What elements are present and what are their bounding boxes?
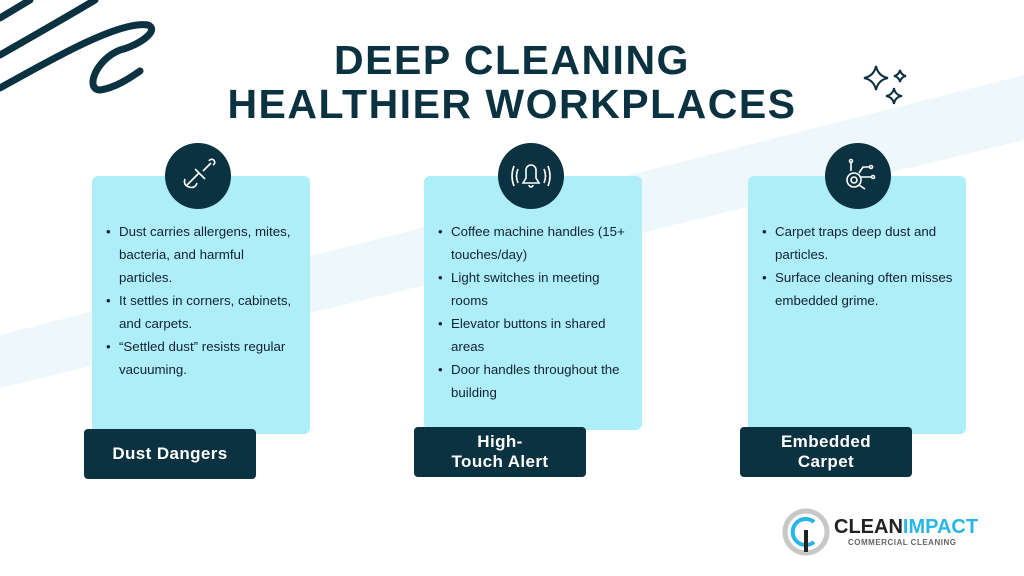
panel: dust dangers <box>92 176 310 434</box>
label: dust dangers: Dust Dangers <box>112 444 228 463</box>
logo <box>782 508 978 556</box>
label: high touch <box>414 427 586 477</box>
logo: COMMERCIAL CLEANING <box>848 538 956 547</box>
label: dust dangers <box>84 429 256 479</box>
icon: duster <box>165 143 231 209</box>
panel: dust dangers: It settles in corners, cabinets, and carpets. <box>119 293 291 331</box>
panel: dust dangers: “Settled dust” resists regular vacuuming. <box>119 339 285 377</box>
panel: dust dangers: Dust carries allergens, mites, bacteria, and harmful particles. <box>119 224 290 285</box>
logo: CLEANIMPACT <box>834 516 978 538</box>
label: high touch: High- <box>477 432 523 451</box>
panel: embedded carpet: Carpet traps deep dust and particles. <box>775 224 936 262</box>
panel: embedded carpet: Surface cleaning often misses embedded grime. <box>775 270 952 308</box>
label: high touch: Touch Alert <box>452 452 548 471</box>
title <box>227 37 797 127</box>
panel: high touch: Light switches in meeting rooms <box>451 270 600 308</box>
title: DEEP CLEANING <box>334 37 690 83</box>
icon: bell alert <box>498 143 564 209</box>
icon: gear circuit <box>825 143 891 209</box>
label: embedded carpet: Embedded <box>781 432 871 451</box>
panel: high touch <box>424 176 642 430</box>
label: embedded carpet <box>740 427 912 477</box>
title: HEALTHIER WORKPLACES <box>227 81 797 127</box>
panel: embedded carpet <box>748 176 966 434</box>
panel: high touch: Elevator buttons in shared areas <box>451 316 606 354</box>
icon: sparkles <box>864 66 906 104</box>
label: embedded carpet: Carpet <box>798 452 854 471</box>
decorative squiggle <box>0 0 156 94</box>
panel: high touch: Coffee machine handles (15+ touches/day) <box>451 224 625 262</box>
panel: high touch: Door handles throughout the building <box>451 362 620 400</box>
